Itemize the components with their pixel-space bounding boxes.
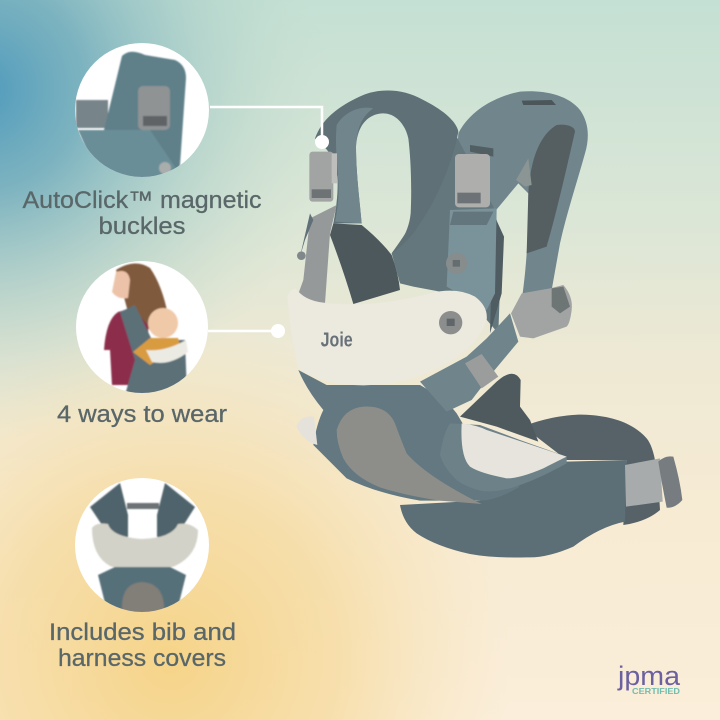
- hip belt: [400, 460, 627, 558]
- right shoulder strap: [453, 91, 588, 300]
- heading line two: harness covers: [58, 645, 226, 672]
- mesh seat panel: [337, 407, 482, 504]
- lower pouch: [297, 370, 538, 501]
- leg flap: [440, 423, 567, 491]
- centre back panel: [392, 137, 502, 333]
- chest strap and buckle: [420, 313, 518, 412]
- circle photo: parent wearing baby: [76, 261, 208, 395]
- Joie logo: Joie: [321, 330, 353, 352]
- connector line to buckle: [210, 107, 329, 149]
- left shoulder strap: [315, 90, 458, 304]
- bib snap button: [439, 311, 462, 334]
- heading: 4 ways to wear: 4 ways to wear: [57, 401, 227, 428]
- heading: AutoClick magnetic buckles: AutoClick™ magnetic: [22, 187, 262, 214]
- front pocket strap: [446, 208, 497, 310]
- mesh side panel: [297, 205, 337, 303]
- product photo: baby carrier: [287, 90, 682, 558]
- heading: Includes bib and harness covers: Includes bib and: [49, 619, 236, 646]
- JPMA certified logo: jpma: [617, 661, 681, 691]
- left buckle: [309, 152, 337, 202]
- JPMA certified logo: CERTIFIED: [632, 687, 680, 696]
- connector line to bib: [208, 324, 285, 338]
- right buckle: [455, 145, 493, 207]
- circle photo: bib and harness covers: [75, 478, 209, 615]
- hanging strap bundle: [511, 285, 572, 338]
- hip belt inner padding: [523, 415, 660, 525]
- bib cover: [287, 288, 487, 385]
- heading line two: buckles: [98, 213, 186, 240]
- dark side strip: [490, 213, 504, 333]
- circle photo: magnetic buckle: [75, 43, 209, 180]
- belt webbing and buckle: [625, 456, 682, 508]
